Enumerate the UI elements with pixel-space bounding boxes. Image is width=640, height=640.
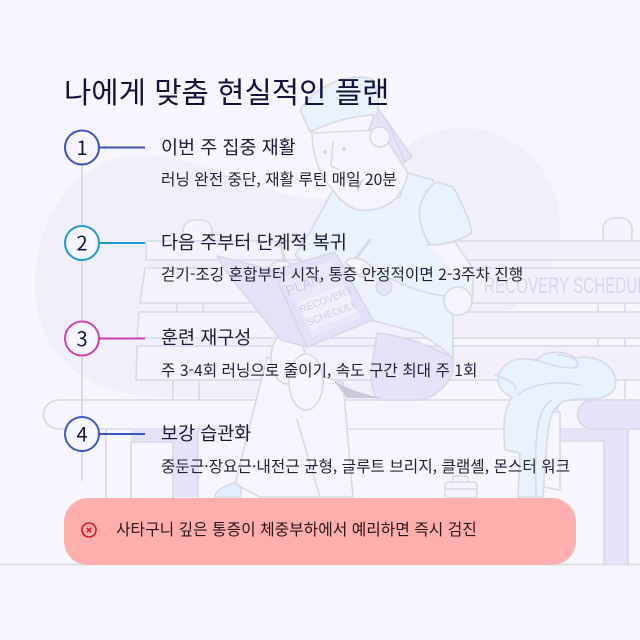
step 2 marker	[65, 226, 145, 260]
book: SCHEDULE	[305, 299, 360, 329]
step 3 description: 주 3-4회 러닝으로 줄이기, 속도 구간 최대 주 1회	[161, 358, 477, 381]
person	[215, 77, 473, 497]
face	[312, 130, 408, 210]
callout: warning	[64, 498, 576, 565]
timeline vertical line	[81, 164, 83, 480]
lower leg and shoe	[235, 357, 353, 497]
step 3 marker: 3	[76, 323, 88, 352]
title: 나에게 맞춤 현실적인 플랜	[64, 69, 389, 112]
warning text: 사타구니 깊은 통증이 체중부하에서 예리하면 즉시 검진	[116, 517, 477, 540]
pens	[280, 240, 370, 265]
background blobs	[35, 128, 560, 400]
step 4 marker: 4	[76, 418, 88, 448]
icon: warning x in circle	[81, 522, 97, 538]
sleeve	[420, 182, 472, 245]
step 2 description: 걷기-조깅 혼합부터 시작, 통증 안정적이면 2-3주차 진행	[161, 262, 523, 285]
floor line	[0, 564, 640, 566]
arm	[427, 242, 473, 290]
hands	[268, 261, 295, 280]
step 3 heading: 훈련 재구성	[161, 324, 251, 350]
bench	[44, 218, 640, 565]
step 1 heading: 이번 주 집중 재활	[161, 134, 296, 160]
cap	[300, 77, 378, 132]
book: PLAN	[283, 271, 323, 299]
neck shade flap	[368, 107, 412, 168]
step 1 marker	[65, 130, 145, 164]
step 3 marker	[65, 322, 145, 356]
shirt torso	[295, 173, 473, 358]
towel	[495, 352, 616, 497]
step 4 heading: 보강 습관화	[161, 420, 251, 446]
step 4 description: 중둔근·장요근·내전근 균형, 글루트 브리지, 클램셸, 몬스터 워크	[161, 454, 570, 477]
book	[217, 252, 373, 347]
shorts	[371, 333, 453, 400]
step 2 marker: 2	[76, 228, 88, 256]
step 2 heading: 다음 주부터 단계적 복귀	[161, 229, 347, 255]
bag	[445, 476, 477, 498]
step 4 marker	[65, 417, 145, 451]
step 1 description: 러닝 완전 중단, 재활 루틴 매일 20분	[161, 167, 397, 190]
knee	[271, 332, 305, 384]
book: RECOVERY	[298, 285, 355, 316]
step 1 marker: 1	[76, 132, 88, 161]
